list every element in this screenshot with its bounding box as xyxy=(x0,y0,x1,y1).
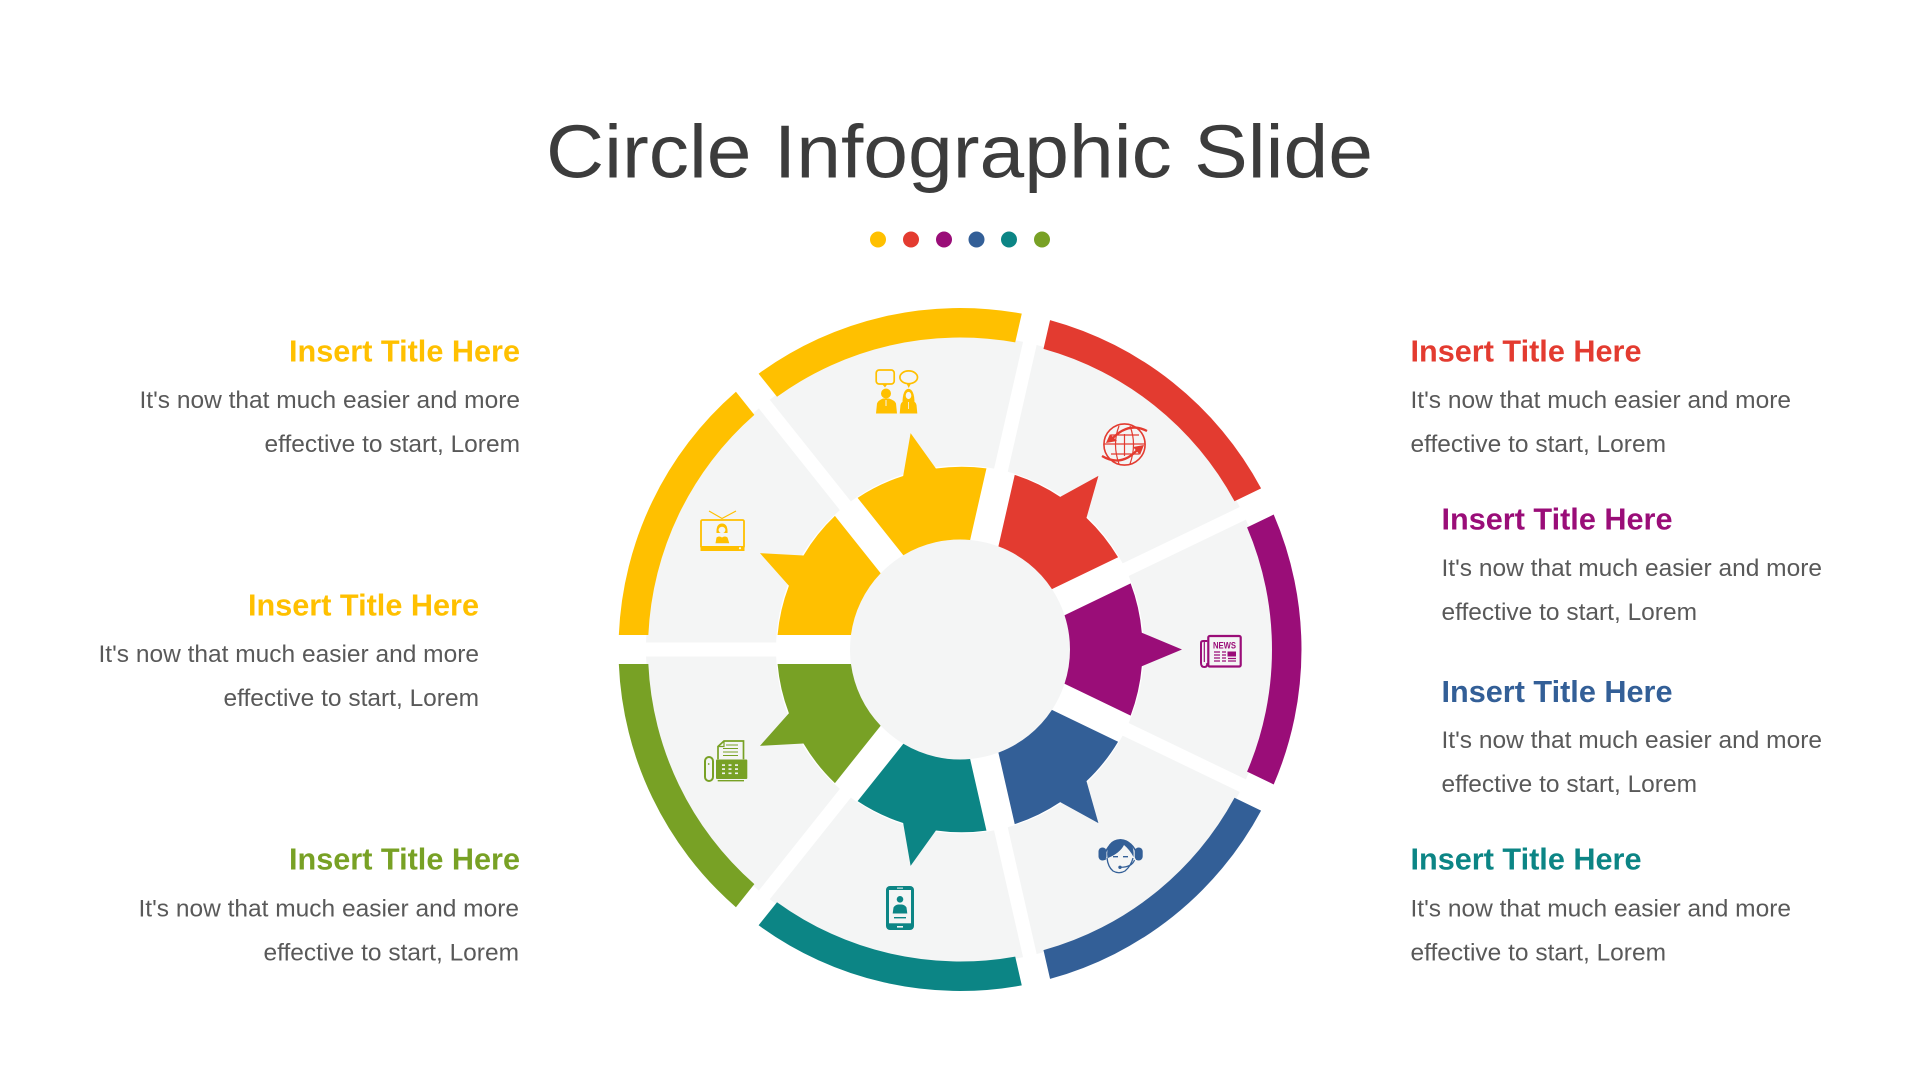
text block: bottom right teal: Insert Title Here xyxy=(1410,842,1642,876)
icon: headset agent xyxy=(1098,839,1143,873)
text block: lower right blue: It's now that much easier and more xyxy=(1442,727,1822,754)
text block: middle left yellow xyxy=(98,588,479,712)
text block: bottom right teal: effective to start, Lorem xyxy=(1410,940,1666,966)
text block: top left yellow xyxy=(140,334,520,458)
segment: teal phone xyxy=(752,721,1068,1012)
segment: blue headset xyxy=(920,647,1278,1001)
segment: green fax xyxy=(594,573,924,919)
text block: top right red: effective to start, Lorem xyxy=(1410,431,1666,458)
text block: bottom left green: It's now that much easier and more xyxy=(138,896,519,922)
text block: middle left yellow: It's now that much easier and more xyxy=(98,641,479,668)
segment: purple news xyxy=(1065,515,1301,784)
text block: bottom right teal xyxy=(1410,842,1791,966)
icon: people with speech bubbles xyxy=(876,370,918,414)
text block: top right red: It's now that much easier and more xyxy=(1410,387,1791,414)
text block: upper right purple xyxy=(1442,502,1822,626)
icon: phone contact xyxy=(886,886,914,930)
icon: newspaper: NEWS xyxy=(1213,640,1236,652)
icon: newspaper xyxy=(1201,636,1241,667)
text block: middle left yellow: Insert Title Here xyxy=(248,588,479,622)
text block: lower right blue xyxy=(1442,674,1822,798)
icon: globe with arrows xyxy=(1102,424,1147,465)
colour dots row xyxy=(870,232,1050,248)
text block: top left yellow: effective to start, Lorem xyxy=(264,431,520,458)
centre circle xyxy=(850,540,1070,760)
circle diagram xyxy=(594,287,1301,1012)
icon: tv presenter xyxy=(700,511,744,551)
text block: top right red: Insert Title Here xyxy=(1410,334,1642,369)
text block: bottom left green: effective to start, Lorem xyxy=(264,940,519,966)
segment: yellow tv xyxy=(594,380,924,726)
text block: top left yellow: It's now that much easier and more xyxy=(140,387,520,414)
title: Circle Infographic Slide xyxy=(546,110,1373,194)
text block: top left yellow: Insert Title Here xyxy=(289,334,520,369)
icon: fax machine xyxy=(705,741,747,781)
text block: bottom right teal: It's now that much easier and more xyxy=(1410,896,1791,922)
text block: lower right blue: effective to start, Lorem xyxy=(1442,771,1697,798)
text block: upper right purple: Insert Title Here xyxy=(1442,502,1672,536)
text block: lower right blue: Insert Title Here xyxy=(1442,674,1672,709)
text block: bottom left green xyxy=(138,842,520,966)
segment: red globe xyxy=(920,298,1278,652)
segment: yellow people xyxy=(752,287,1068,578)
text block: upper right purple: It's now that much easier and more xyxy=(1442,555,1822,582)
text block: middle left yellow: effective to start, Lorem xyxy=(224,685,479,712)
text block: bottom left green: Insert Title Here xyxy=(289,842,520,876)
text block: upper right purple: effective to start, Lorem xyxy=(1442,599,1697,626)
text block: top right red xyxy=(1410,334,1791,458)
